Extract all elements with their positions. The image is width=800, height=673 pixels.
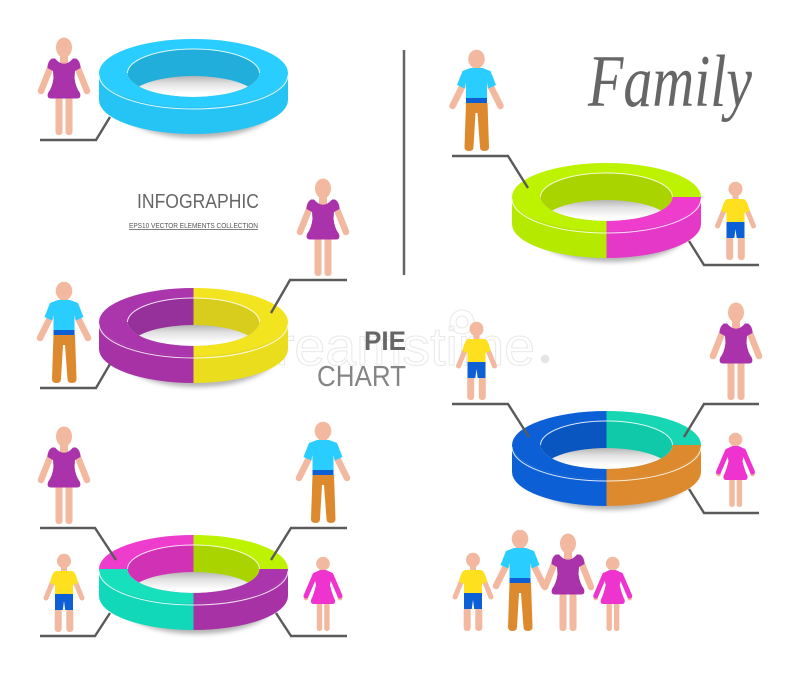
subheading: collection: EPS10 VECTOR ELEMENTS COLLECTION: [129, 221, 258, 230]
icon: man, purple ring: [40, 282, 88, 383]
icon: girl, blue-orange ring: [716, 433, 755, 507]
icon: boy, lime ring: [718, 182, 754, 260]
heading: chart: CHART: [317, 361, 406, 393]
divider line: [403, 50, 405, 275]
ring chart: solid blue: [99, 39, 288, 138]
family group: [455, 530, 632, 631]
icon: boy, blue ring: [458, 322, 494, 400]
icon: man, lime ring: [452, 50, 500, 151]
icon: boy, four-part ring: [46, 554, 82, 632]
icon: woman, blue-orange ring: [713, 302, 759, 400]
ring chart: blue teal orange: [512, 411, 701, 510]
icon: man, four-part ring: [299, 422, 347, 523]
ring chart: purple and yellow: [99, 288, 288, 387]
icon: woman, four-part ring: [41, 426, 87, 524]
ring chart: lime and magenta: [512, 163, 701, 262]
ring chart: four segments magenta lime teal purple: [99, 535, 288, 634]
icon: woman, yellow ring: [300, 178, 346, 276]
connector lines: [40, 117, 759, 636]
icon: girl, four-part ring: [304, 557, 342, 631]
heading: Family: Family: [587, 41, 752, 123]
heading: pie: PIE: [364, 326, 406, 356]
icon: woman, blue ring: [41, 38, 87, 135]
heading: infographic: INFOGRAPHIC: [137, 190, 259, 213]
watermark: dreamstime: [245, 317, 535, 377]
